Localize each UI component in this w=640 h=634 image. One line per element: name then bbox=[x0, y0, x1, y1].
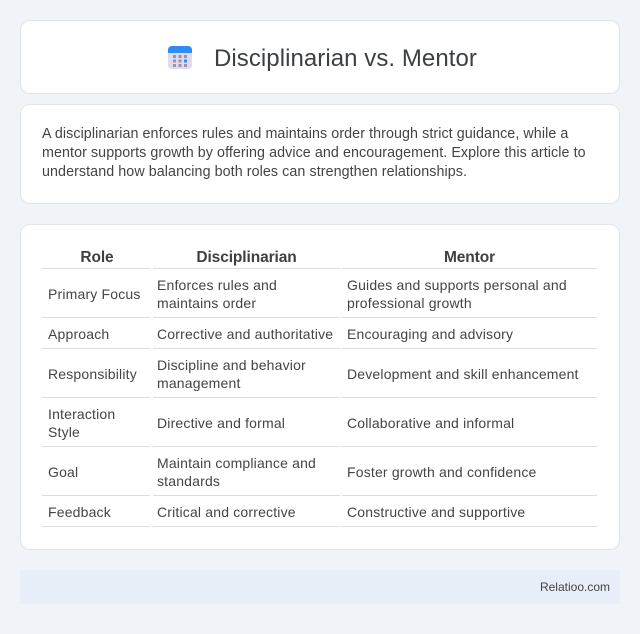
row: Primary Focus: Guides and supports personal and bbox=[347, 277, 567, 293]
icon: calendar bbox=[168, 46, 192, 69]
row: Feedback bbox=[48, 504, 525, 520]
intro card bbox=[20, 104, 620, 204]
row: Goal bbox=[48, 455, 536, 489]
row: Feedback: Critical and corrective bbox=[157, 504, 296, 520]
row: Primary Focus: professional growth bbox=[347, 295, 472, 311]
row: Approach: Corrective and authoritative bbox=[157, 326, 333, 342]
comparison table bbox=[42, 249, 597, 527]
row: Approach bbox=[48, 326, 513, 342]
intro text: understand how balancing both roles can strengthen relationships. bbox=[42, 164, 467, 180]
row: Interaction Style: Interaction bbox=[48, 406, 115, 422]
intro text: mentor supports growth by offering advice and encouragement. Explore this article to bbox=[42, 145, 586, 161]
row: Goal: Goal bbox=[48, 464, 78, 480]
table header: Role: Role bbox=[80, 249, 114, 266]
row: Interaction Style: Collaborative and informal bbox=[347, 415, 514, 431]
title: Disciplinarian vs. Mentor bbox=[214, 45, 477, 72]
row: Responsibility: management bbox=[157, 375, 241, 391]
row: Interaction Style: Style bbox=[48, 424, 80, 440]
footer text: Relatioo.com bbox=[540, 580, 610, 594]
row: Responsibility: Development and skill enhancement bbox=[347, 366, 579, 382]
row: Approach: Approach bbox=[48, 326, 109, 342]
header card bbox=[20, 20, 620, 94]
row: Primary Focus bbox=[48, 277, 567, 311]
row: Responsibility: Discipline and behavior bbox=[157, 357, 306, 373]
row: Interaction Style bbox=[48, 406, 514, 440]
intro text bbox=[42, 126, 586, 180]
row: Goal: standards bbox=[157, 473, 220, 489]
row: Interaction Style: Directive and formal bbox=[157, 415, 285, 431]
table header: Mentor: Mentor bbox=[444, 249, 495, 266]
row: Responsibility: Responsibility bbox=[48, 366, 137, 382]
intro text: A disciplinarian enforces rules and maintains order through strict guidance, while a bbox=[42, 126, 568, 142]
row: Goal: Foster growth and confidence bbox=[347, 464, 536, 480]
table header: Disciplinarian: Disciplinarian bbox=[196, 249, 297, 266]
row: Feedback: Constructive and supportive bbox=[347, 504, 525, 520]
footer bar bbox=[20, 570, 620, 604]
row: Feedback: Feedback bbox=[48, 504, 111, 520]
row: Responsibility bbox=[48, 357, 579, 391]
row: Primary Focus: Primary Focus bbox=[48, 286, 141, 302]
row: Primary Focus: maintains order bbox=[157, 295, 256, 311]
row: Approach: Encouraging and advisory bbox=[347, 326, 513, 342]
comparison table card bbox=[20, 224, 620, 550]
row: Goal: Maintain compliance and bbox=[157, 455, 316, 471]
row: Primary Focus: Enforces rules and bbox=[157, 277, 277, 293]
